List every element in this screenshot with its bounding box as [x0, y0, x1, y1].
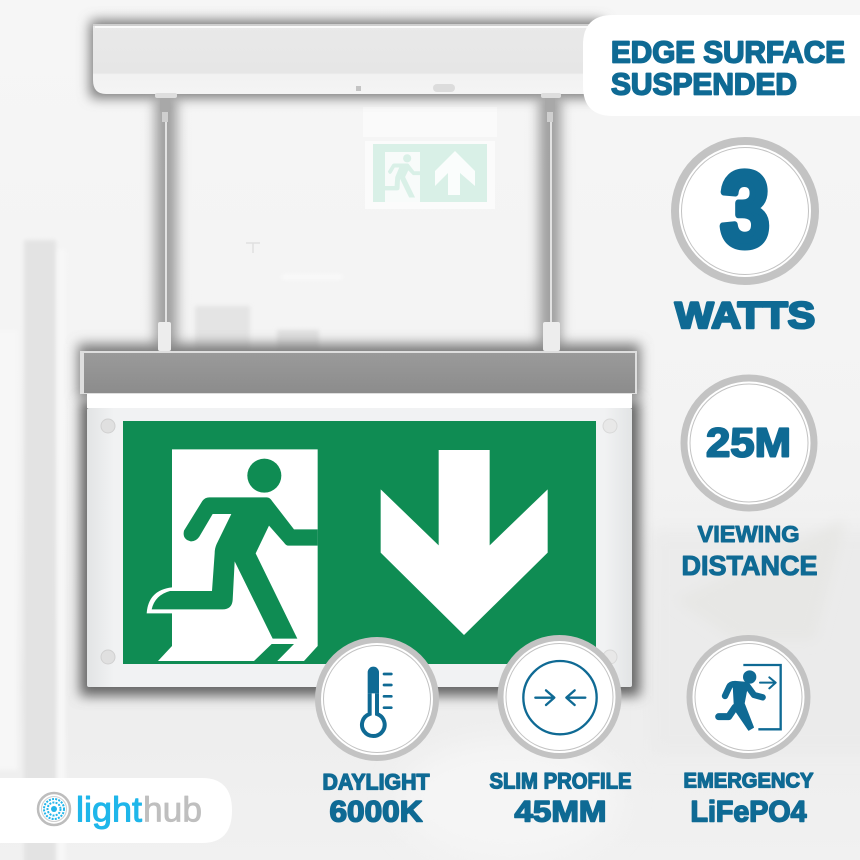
badge: 25M viewing distance: VIEWING	[698, 521, 800, 547]
title pill: SUSPENDED	[611, 68, 797, 102]
badge: slim profile 45mm: SLIM PROFILE	[490, 768, 632, 794]
acrylic sign panel	[87, 408, 632, 687]
badge: emergency LiFePO4: LiFePO4	[690, 796, 807, 828]
badge: emergency LiFePO4: EMERGENCY	[684, 770, 814, 792]
icon: slim arrows in circle	[523, 661, 597, 734]
badge: 3 watts: WATTS	[675, 295, 815, 336]
icon: person running to door	[719, 665, 781, 730]
green exit sign face	[123, 421, 596, 664]
badge: daylight 6000K: DAYLIGHT	[322, 770, 430, 794]
title pill: EDGE SURFACE	[611, 36, 845, 70]
logo pill: hub	[143, 790, 202, 830]
icon: lighthub logo mark	[38, 793, 70, 825]
left suspension wire	[155, 93, 177, 351]
ceiling mount housing	[93, 24, 600, 94]
badge: slim profile 45mm: 45MM	[514, 796, 606, 828]
badge: 25M viewing distance: DISTANCE	[682, 550, 818, 581]
faint background exit sign	[363, 107, 497, 209]
fixture shadows	[78, 20, 640, 696]
icon: thermometer	[362, 667, 391, 736]
title pill	[583, 15, 860, 116]
badge: emergency LiFePO4	[684, 638, 814, 828]
badge: 3 watts: 3	[720, 151, 770, 269]
logo pill: light	[76, 790, 142, 830]
badge: 3 watts	[675, 141, 815, 336]
right suspension wire	[541, 93, 561, 351]
badge: daylight 6000K: 6000K	[330, 796, 423, 828]
badge: 25M viewing distance: 25M	[706, 420, 791, 466]
running man and door	[147, 449, 318, 661]
badge: daylight 6000K	[318, 640, 436, 828]
badge: 25M viewing distance	[682, 378, 818, 581]
badge: slim profile 45mm	[490, 638, 632, 828]
down arrow	[381, 450, 548, 635]
sign head bar	[80, 351, 637, 408]
logo pill	[0, 778, 232, 843]
